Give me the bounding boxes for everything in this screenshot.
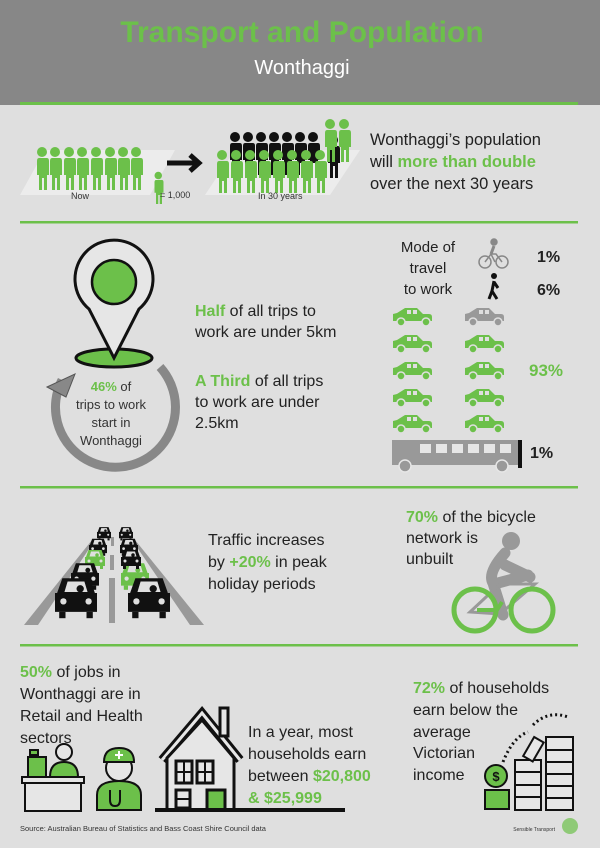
text: 46%: 46% of: [91, 379, 132, 394]
text: traffic: Traffic increases: [208, 532, 324, 549]
mode of travel chart: to work: [404, 281, 453, 298]
mode of travel chart: 6%: [537, 282, 560, 299]
text: bicycle network: unbuilt: [406, 551, 454, 568]
text: household income: households earn: [248, 746, 366, 763]
text: 72% households: 72% of households: [413, 680, 549, 697]
mode of travel chart: Mode of: [401, 239, 456, 256]
text: household income: In a year, most: [248, 724, 353, 741]
icon: nurse: [97, 748, 141, 810]
icon: coin stacks: [485, 715, 573, 810]
people in 30 years: In 30 years: [258, 191, 303, 201]
icon: circular arrow: [47, 367, 175, 467]
text: bicycle network: 70% of the bicycle: [406, 509, 536, 526]
text: 46%: Wonthaggi: [80, 433, 142, 448]
arrow: [167, 155, 199, 171]
icon: cashier: [22, 744, 84, 811]
text: jobs: [20, 664, 143, 747]
legend: = 1,000: [160, 190, 190, 200]
header: [0, 0, 600, 105]
mode of travel chart: 1%: [530, 445, 553, 462]
mode of travel chart: 1%: [537, 249, 560, 266]
text: 72% households: earn below the: [413, 702, 518, 719]
people now: [20, 147, 175, 201]
icon: traffic road: [24, 527, 204, 625]
text: 46%: start in: [91, 415, 131, 430]
logo: Sensible Transport: [513, 827, 556, 833]
text: trip distances: 2.5km: [195, 415, 239, 432]
text: trip distances: work are under 5km: [194, 324, 336, 341]
logo: [513, 818, 578, 834]
text: jobs: 50% of jobs in: [20, 664, 121, 681]
text: bicycle network: network is: [406, 530, 478, 547]
icon: house: [155, 708, 345, 810]
people now: Now: [71, 191, 89, 201]
mode of travel chart: 93%: [529, 361, 563, 380]
source: Source: Australian Bureau of Statistics and Bass Coast Shire Council data: [20, 824, 267, 833]
icon: bicycle small: [479, 239, 508, 268]
text: 46%: trips to work: [76, 397, 147, 412]
text: 72% households: average: [413, 724, 471, 741]
icon: cyclist: [454, 532, 553, 631]
title: Transport and Population: [120, 16, 484, 49]
text: household income: [248, 724, 371, 807]
text: traffic: holiday periods: [208, 576, 316, 593]
text: household income: between $20,800: [248, 768, 371, 785]
text: bicycle network: [406, 509, 536, 568]
text: 72% households: Victorian: [413, 745, 475, 762]
mode of travel chart: [392, 239, 563, 472]
population text: over the next 30 years: [370, 175, 533, 193]
text: household income: & $25,999: [248, 790, 322, 807]
text: trip distances: [194, 303, 336, 432]
population text: Wonthaggi’s population: [370, 131, 541, 149]
icon: map pin: [75, 240, 153, 367]
text: trip distances: A Third of all trips: [195, 373, 323, 390]
text: jobs: sectors: [20, 730, 72, 747]
population text: will more than double: [369, 153, 536, 171]
mode of travel chart: travel: [410, 260, 446, 277]
text: 72% households: income: [413, 767, 465, 784]
population text: [369, 131, 541, 193]
people in 30 years: [205, 119, 360, 201]
cars: [393, 308, 504, 433]
text: traffic: by +20% in peak: [208, 554, 328, 571]
legend: [154, 172, 190, 204]
subtitle: Wonthaggi: [254, 57, 350, 79]
text: trip distances: Half of all trips to: [195, 303, 316, 320]
panel: traffic: [24, 509, 553, 631]
panel: population: [20, 119, 541, 204]
text: trip distances: to work are under: [195, 394, 320, 411]
panel: trips: [47, 239, 563, 472]
text: jobs: Retail and Health: [20, 708, 143, 725]
icon: coin stacks: $: [492, 769, 500, 784]
icon: walker: [489, 273, 498, 299]
text: 46%: [76, 379, 147, 448]
panel: jobs & income: [20, 664, 578, 834]
text: 72% households: [413, 680, 549, 784]
text: jobs: Wonthaggi are in: [20, 686, 141, 703]
text: traffic: [208, 532, 328, 593]
icon: bus: [392, 440, 522, 472]
